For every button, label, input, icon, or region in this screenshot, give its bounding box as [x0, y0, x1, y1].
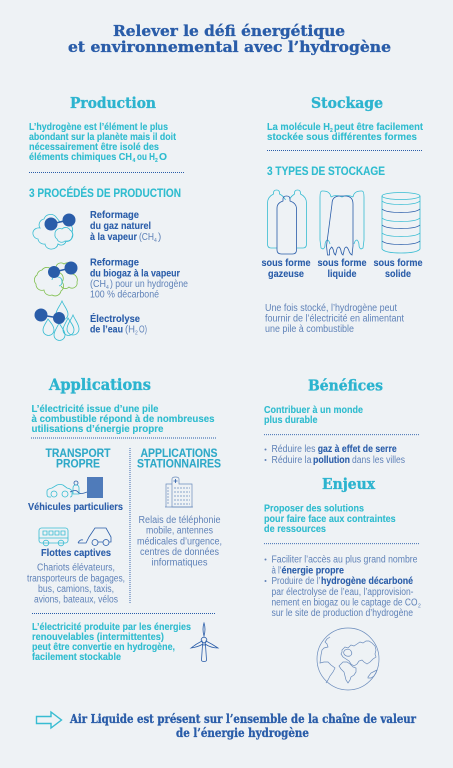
text: fleet list: bus, camions, taxis, [38, 584, 114, 595]
labels: storage types: sous forme [318, 258, 367, 269]
stockage intro text [267, 122, 424, 143]
icon: natural gas cloud with molecule [33, 214, 76, 249]
list: challenges: hydrogène décarboné [321, 576, 413, 587]
production intro text: abondant sur la planète mais il doit [29, 132, 176, 143]
list: challenges: à l’ [272, 566, 282, 576]
text: proposer: Proposer des solutions [264, 504, 364, 515]
text: électrolyse: O) [139, 324, 147, 336]
text: électrolyse [90, 313, 147, 336]
production intro text: 2 [155, 158, 158, 164]
production intro text: 4 [132, 158, 136, 164]
text: renewable electricity [32, 622, 191, 663]
text: électrolyse: de l’eau [90, 324, 123, 336]
list: benefits: Réduire la [272, 455, 312, 466]
text: fleet list: transporteurs de bagages, [27, 574, 125, 584]
panel: bénéfices [264, 378, 420, 466]
labels: storage types [262, 258, 423, 280]
list: benefits: pollution [313, 455, 350, 466]
text: stationary uses: Relais de téléphonie [138, 515, 220, 526]
text: renewable electricity: peut être convertie en hydrogène, [32, 642, 175, 653]
icon: bus and forklift [39, 528, 111, 546]
text: reformage biogaz: Reformage [90, 258, 140, 268]
text: reformage biogaz [90, 258, 188, 300]
list: challenges: nement en biogaz ou le captage de CO [272, 598, 418, 608]
callout text: de l’énergie hydrogène [176, 725, 309, 740]
stockage intro text: 2 [330, 128, 333, 134]
text: stationary uses: informatiques [152, 558, 208, 568]
text: reformage biogaz: ) pour un hydrogène [110, 279, 188, 290]
labels: storage types: liquide [328, 269, 357, 280]
subheading: applications stationnaires [137, 446, 221, 471]
text: reformage biogaz: 4 [106, 285, 109, 291]
callout text [69, 711, 416, 740]
icon: gas bottles [268, 190, 306, 254]
text: reformage biogaz: 100 % décarboné [90, 290, 159, 300]
list: challenges: par électrolyse de l’eau, l’approvision- [272, 587, 414, 598]
stockage intro text: La molécule H [267, 122, 330, 133]
text: reformage gaz naturel: à la vapeur [90, 232, 137, 243]
title: Relever le défi énergétique [113, 23, 345, 40]
text: stationary uses: centres de données [140, 547, 219, 558]
text: proposer: pour faire face aux contraintes [264, 514, 396, 525]
text: renewable electricity: renouvelables (intermittentes) [32, 632, 164, 643]
production intro text [29, 122, 176, 164]
applications intro text [32, 404, 215, 435]
icon: globe [317, 628, 379, 690]
production intro text: nécessairement être isolé des [29, 142, 159, 153]
labels: storage types: gazeuse [268, 269, 305, 280]
applications intro text: à combustible répond à de nombreuses [32, 414, 215, 425]
subheading: applications stationnaires: STATIONNAIRES [137, 457, 221, 471]
icon: arrow [36, 712, 62, 728]
panel: stockage [262, 95, 424, 335]
text: reformage gaz naturel: ) [158, 232, 161, 243]
title [68, 23, 391, 56]
subheading: transport propre [46, 446, 111, 471]
heading: production: Production [70, 95, 156, 112]
heading: bénéfices: Bénéfices [308, 378, 383, 395]
list: benefits: gaz à effet de serre [318, 444, 397, 455]
icon: biogas cloud with molecule [34, 262, 78, 296]
text: proposer: de ressources [264, 524, 326, 535]
text: reformage biogaz: du biogaz à la vapeur [90, 268, 180, 280]
production intro text: ou H [137, 152, 155, 163]
icon: hospital building [165, 477, 193, 507]
subheading: transport propre: TRANSPORT [46, 446, 111, 460]
text: fleet list: avions, bateaux, vélos [34, 595, 118, 606]
list: challenges: énergie propre [282, 566, 344, 576]
text: renewable electricity: L’électricité produite par les énergies [32, 622, 191, 633]
text: renewable electricity: facilement stockable [32, 652, 121, 663]
text: reformage biogaz: (CH [90, 279, 106, 290]
text: reformage gaz naturel: du gaz naturel [90, 221, 151, 232]
text: contribuer [264, 405, 363, 426]
panel: production [29, 95, 188, 340]
list: benefits [264, 444, 405, 466]
subheading: applications stationnaires: APPLICATIONS [140, 446, 218, 460]
subheading: 3 procédés: 3 PROCÉDÉS DE PRODUCTION [29, 185, 181, 200]
production intro text: O [159, 152, 167, 163]
label: véhicules particuliers: Véhicules particuliers [28, 502, 124, 513]
text: fuel cell note: Une fois stocké, l’hydrogène peut [265, 303, 397, 314]
text: stationary uses [137, 515, 222, 568]
labels: storage types: sous forme [262, 258, 311, 269]
label: flottes captives: Flottes captives [41, 548, 112, 559]
labels: storage types: sous forme [374, 258, 423, 269]
text: reformage gaz naturel: Reformage [90, 210, 140, 221]
callout: air liquide value chain [36, 711, 416, 740]
list: challenges: sur le site de production d’hydrogène [272, 608, 413, 619]
icon: liquid tanks [320, 191, 364, 255]
text: fuel cell note [265, 303, 404, 335]
list: benefits: dans les villes [352, 455, 405, 466]
applications intro text: utilisations d’énergie propre [32, 424, 164, 435]
production intro text: L’hydrogène est l’élément le plus [29, 122, 168, 133]
text: stationary uses: mobile, antennes [146, 526, 213, 537]
text: contribuer: Contribuer à un monde [264, 405, 363, 416]
panel: applications [27, 375, 222, 663]
icon: solid storage stack [382, 192, 420, 253]
title: et environnemental avec l’hydrogène [68, 39, 391, 56]
heading: applications: Applications [48, 375, 151, 394]
heading: enjeux: Enjeux [322, 476, 375, 493]
subheading: transport propre: PROPRE [56, 457, 100, 471]
applications intro text: L’électricité issue d’une pile [32, 404, 159, 415]
list: benefits: Réduire les [272, 444, 316, 455]
list: challenges: 2 [418, 604, 421, 610]
production intro text: éléments chimiques CH [29, 152, 132, 163]
icon: water electrolysis drops with molecule [34, 301, 79, 340]
subheading: 3 types: 3 TYPES DE STOCKAGE [267, 164, 385, 178]
text: fuel cell note: une pile à combustible [265, 324, 354, 335]
text: reformage gaz naturel: (CH [139, 232, 154, 243]
list: challenges [264, 555, 421, 619]
stockage intro text: peut être facilement [334, 122, 424, 133]
list: challenges: Produire de l’ [272, 576, 320, 587]
text: reformage gaz naturel: 4 [154, 238, 157, 244]
text: électrolyse: Électrolyse [90, 313, 141, 325]
text: reformage gaz naturel [90, 210, 161, 244]
text: électrolyse: (H [125, 324, 135, 336]
text: fleet list: Chariots élévateurs, [37, 563, 115, 574]
text: fleet list [27, 563, 125, 606]
text: fuel cell note: fournir de l’électricité en alimentant [265, 314, 404, 324]
heading: stockage: Stockage [311, 95, 383, 112]
text: proposer [264, 504, 396, 535]
stockage intro text: stockée sous différentes formes [267, 132, 417, 143]
labels: storage types: solide [385, 269, 412, 280]
text: stationary uses: médicales d’urgence, [137, 536, 222, 548]
icon: wind turbine [191, 623, 218, 662]
text: contribuer: plus durable [264, 415, 318, 426]
text: électrolyse: 2 [135, 330, 138, 336]
list: challenges: Faciliter l’accès au plus grand nombre [272, 555, 418, 566]
icon: car at charging station [47, 477, 103, 498]
panel: enjeux [264, 476, 421, 690]
